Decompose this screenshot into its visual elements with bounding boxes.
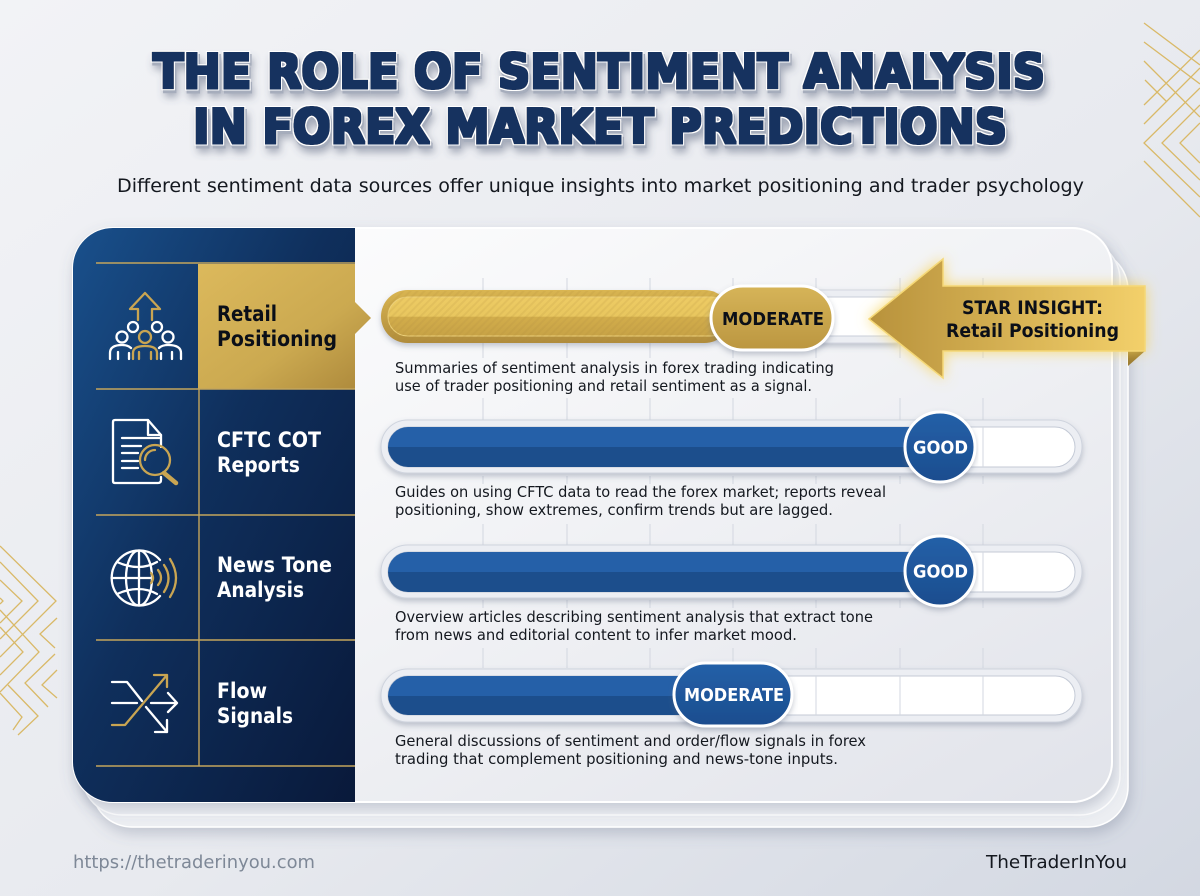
badge: good: GOOD (913, 562, 968, 582)
stacked card layers (82, 240, 1128, 827)
title: THE ROLE OF SENTIMENT ANALYSIS (153, 45, 1045, 100)
row 3: news tone bar (381, 536, 1082, 644)
description: Overview articles describing sentiment analysis that extract tone (395, 608, 873, 626)
badge: moderate: MODERATE (722, 309, 824, 330)
label: CFTC COT reports (217, 428, 322, 477)
description (395, 359, 834, 395)
label: flow signals: Signals (217, 704, 293, 728)
description: General discussions of sentiment and order/flow signals in forex (395, 732, 866, 750)
label: retail positioning: Retail (217, 302, 277, 326)
footer brand: TheTraderInYou (985, 852, 1127, 873)
description: positioning, show extremes, confirm trends but are lagged. (395, 501, 833, 519)
badge: good: GOOD (913, 438, 968, 458)
blue fill (388, 552, 930, 592)
label: retail positioning: Positioning (217, 327, 337, 351)
label: CFTC COT reports: CFTC COT (217, 428, 322, 452)
row 1: retail positioning bar (381, 286, 900, 395)
description: Guides on using CFTC data to read the forex market; reports reveal (395, 483, 886, 501)
label: CFTC COT reports: Reports (217, 453, 300, 477)
footer url: https://thetraderinyou.com (73, 852, 315, 873)
callout text: STAR INSIGHT: (962, 297, 1103, 319)
label: news tone analysis: Analysis (217, 578, 304, 602)
icon: document with magnifier (113, 420, 176, 483)
row 4: flow signals bar (381, 663, 1082, 768)
label: news tone analysis: News Tone (217, 553, 332, 577)
blue fill (388, 427, 930, 467)
badge: moderate (711, 286, 833, 350)
callout text: Retail Positioning (946, 320, 1119, 342)
badge: good (905, 536, 975, 606)
label: flow signals (217, 679, 293, 728)
description (395, 608, 873, 644)
icon: crossing flow arrows (112, 675, 177, 732)
badge: good (905, 412, 975, 482)
title: IN FOREX MARKET PREDICTIONS (193, 100, 1007, 155)
main panel (73, 228, 1112, 802)
empty track (740, 290, 900, 343)
label: news tone analysis (217, 553, 332, 602)
badge: moderate: MODERATE (684, 685, 784, 706)
icon: retail crowd with up arrow (110, 293, 181, 359)
description: Summaries of sentiment analysis in forex trading indicating (395, 359, 834, 377)
blue fill (388, 676, 720, 715)
description: trading that complement positioning and news-tone inputs. (395, 750, 838, 768)
sidebar (73, 228, 371, 802)
callout text (946, 297, 1119, 342)
label: retail positioning (217, 302, 337, 351)
callout arrow: star insight (869, 259, 1145, 378)
label: flow signals: Flow (217, 679, 267, 703)
subtitle: Different sentiment data sources offer unique insights into market positioning and trader psychology (117, 175, 1084, 197)
description (395, 732, 866, 768)
chart grid lines (483, 278, 983, 668)
description (395, 483, 886, 519)
gold bar fill (381, 290, 731, 343)
row 2: CFTC COT bar (381, 412, 1082, 519)
description: use of trader positioning and retail sentiment as a signal. (395, 377, 812, 395)
description: from news and editorial content to infer market mood. (395, 626, 797, 644)
badge: moderate (674, 663, 792, 726)
title (153, 45, 1045, 155)
highlighted row: retail positioning (198, 264, 371, 389)
icon: globe with signal waves (112, 550, 176, 606)
